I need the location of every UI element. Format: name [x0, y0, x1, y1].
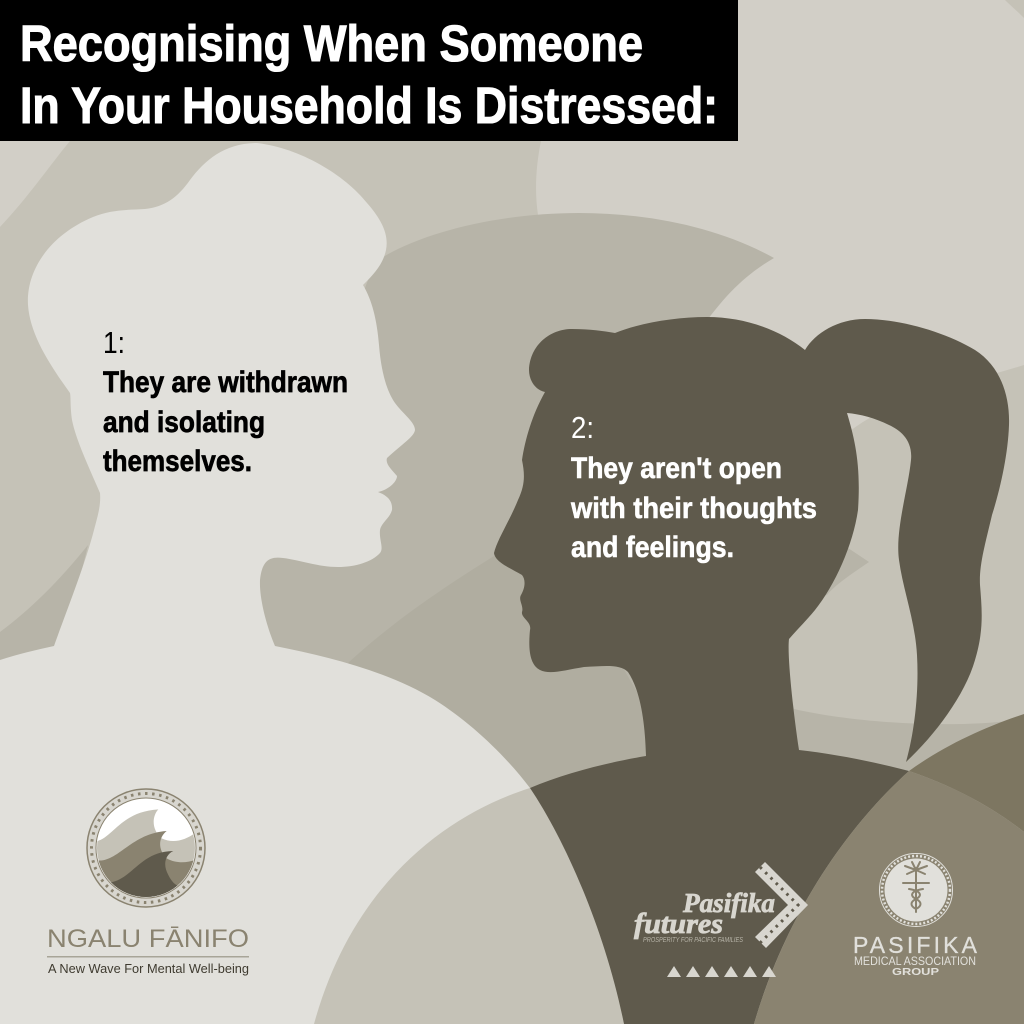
text block: sign two: with their thoughts: [570, 492, 817, 525]
logo: Ngalu Fanifo: NGALU FĀNIFO: [47, 925, 249, 953]
lower-left overlapping circle: [314, 788, 624, 1024]
text block: sign one: They are withdrawn: [103, 366, 348, 399]
dark silhouette: person two: [494, 317, 1009, 1024]
light silhouette: person one: [0, 143, 624, 1024]
text block: sign one: 1:: [103, 325, 125, 360]
logo: Ngalu Fanifo: [47, 789, 249, 976]
logo: Pasifika Futures: Pasifika: [682, 888, 775, 918]
text block: sign one: themselves.: [103, 445, 252, 478]
text block: sign two: [570, 410, 817, 564]
icon: caduceus and palm roundel: [880, 854, 952, 926]
text block: sign one: [103, 325, 348, 478]
logo: Pasifika Futures: futures: [634, 909, 723, 940]
text block: sign two: and feelings.: [571, 531, 734, 564]
bottom-right overlapping circles: [754, 714, 1024, 1024]
text block: sign two: 2:: [571, 410, 594, 445]
icon: wave roundel: [87, 789, 205, 907]
icon: patterned chevron: [755, 862, 808, 948]
icon: row of triangles: [667, 966, 776, 977]
title block: Recognising When Someone: [20, 15, 643, 72]
title block: In Your Household Is Distressed:: [20, 77, 718, 134]
logo: Pasifika Futures: PROSPERITY FOR PACIFIC FAMILIES: [643, 935, 743, 944]
logo: Ngalu Fanifo: A New Wave For Mental Well-being: [48, 961, 249, 976]
text block: sign two: They aren't open: [571, 452, 782, 485]
logo: Pasifika Medical Association Group: [853, 854, 978, 978]
logo: Pasifika Medical Association Group: MEDICAL ASSOCIATION: [854, 954, 976, 968]
logo: Pasifika Medical Association Group: GROUP: [892, 966, 939, 978]
text block: sign one: and isolating: [103, 406, 265, 439]
logo: Pasifika Futures: [634, 862, 808, 977]
logo: Pasifika Medical Association Group: PASIFIKA: [853, 932, 978, 958]
title block: [0, 0, 738, 141]
